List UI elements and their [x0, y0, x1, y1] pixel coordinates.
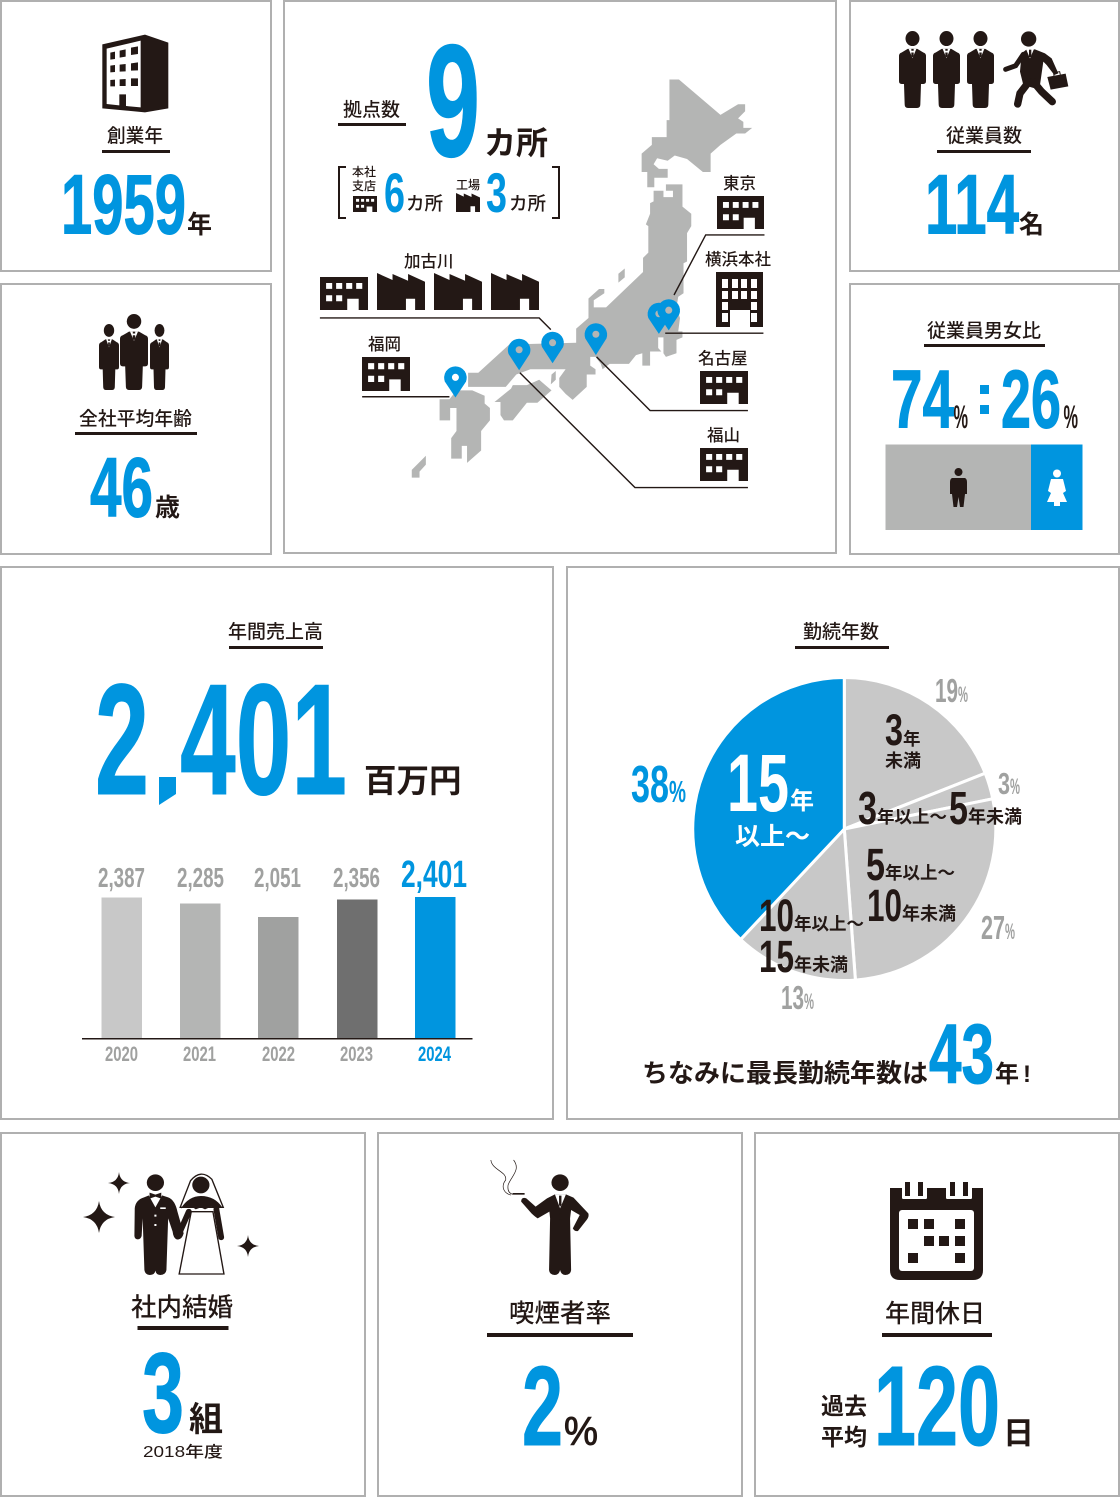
number: 74%:26%: 26: [1001, 352, 1061, 446]
panel: founding year: [1, 1, 271, 271]
bar chart: 2022: [262, 1042, 295, 1066]
site: 福山: [700, 426, 748, 481]
leader lines: [320, 235, 764, 488]
note: 2018年度: 2018年度: [143, 1443, 223, 1461]
pie percent labels: %: [669, 774, 686, 809]
bar chart: 2020: [105, 1042, 138, 1066]
panel: annual sales: [0, 0, 553, 1119]
breakdown: factories: [456, 161, 546, 224]
bar chart: 2,285: [177, 862, 224, 893]
note: longest tenure: ちなみに最長勤続年数は: [642, 1060, 928, 1088]
number: 2,401百万円: [0, 0, 462, 828]
site: 横浜本社: [705, 250, 772, 327]
number: 過去平均120日: 過去: [821, 1393, 867, 1419]
breakdown: offices: 本社: [352, 164, 376, 179]
note: longest tenure: !: [1023, 1061, 1031, 1088]
heading: 勤続年数: [795, 621, 889, 649]
ratio bar: [886, 444, 1082, 530]
bar chart: 2,051: [254, 862, 301, 893]
number: 過去平均120日: 120: [874, 1343, 1000, 1469]
pie label: 3 to 5 years: 年未満: [968, 806, 1022, 827]
pie label: 3 to 5 years: [858, 782, 1022, 834]
pie label: 3 to 5 years: 年以上～: [877, 807, 947, 827]
number: 2,401百万円: 401: [180, 652, 347, 828]
icon: office building: [102, 35, 168, 112]
heading: 従業員男女比: 従業員男女比: [927, 320, 1041, 342]
icon: woman: [1047, 470, 1067, 506]
pie label: under 3 years: 未満: [885, 751, 921, 771]
pie percent labels: %: [1010, 774, 1020, 799]
icon: sparkles: [83, 1172, 259, 1257]
bar chart: 2021: [183, 1042, 216, 1066]
panel: employees: [850, 1, 1119, 271]
number: 114名: 114: [925, 158, 1019, 252]
number: 114名: 名: [1019, 211, 1044, 239]
number: 1959年: 1959: [61, 158, 186, 252]
site: 福岡: 福岡: [368, 335, 401, 354]
heading: 喫煙者率: [487, 1300, 633, 1337]
site: 東京: 東京: [723, 174, 756, 193]
icon: smoker: [491, 1160, 589, 1275]
heading: 創業年: [102, 125, 170, 153]
pie label: 5 to 10 years: 10: [867, 880, 902, 931]
pie percent labels: 3: [998, 766, 1010, 801]
icon: man: [950, 468, 967, 507]
heading: 従業員数: 従業員数: [946, 125, 1022, 147]
number: 74%:26%: %: [954, 399, 968, 435]
pie label: over 15 years: 15: [727, 738, 789, 829]
heading: 創業年: 創業年: [107, 125, 163, 147]
breakdown: factories: カ所: [509, 193, 546, 214]
icon: three people: [99, 314, 169, 390]
site: 東京: [717, 174, 764, 229]
heading: 喫煙者率: 喫煙者率: [509, 1300, 611, 1328]
pie label: 10 to 15 years: [759, 890, 864, 982]
pie label: over 15 years: 年: [790, 788, 814, 815]
heading: 従業員数: [937, 125, 1031, 153]
number: 2%: %: [564, 1410, 598, 1454]
pie label: 10 to 15 years: 15: [759, 931, 794, 982]
pie percent labels: %: [804, 989, 814, 1014]
pie chart: [693, 677, 996, 981]
icon: calendar: [890, 1180, 983, 1280]
pie percent labels: [631, 672, 1020, 1016]
pie label: 5 to 10 years: [866, 839, 956, 931]
pie percent labels: 38: [631, 756, 669, 814]
pie percent labels: 13: [781, 979, 804, 1016]
breakdown: offices: 支店: [352, 178, 376, 193]
heading: 年間休日: [882, 1300, 992, 1337]
number: 2,401百万円: 百万円: [364, 763, 462, 799]
number: 2%: 2: [522, 1343, 563, 1469]
number: 過去平均120日: 平均: [821, 1424, 867, 1450]
site: 加古川: [320, 252, 539, 310]
panel: average age: [1, 284, 271, 554]
heading: 年間休日: 年間休日: [885, 1300, 985, 1328]
panel: annual holidays: [755, 1133, 1119, 1496]
panel: tenure: [567, 567, 1119, 1119]
pie percent labels: 19: [935, 672, 958, 709]
heading: 年間売上高: 年間売上高: [228, 621, 323, 643]
number: 9カ所: カ所: [484, 125, 548, 161]
note: longest tenure: [642, 1007, 1031, 1101]
pie label: 5 to 10 years: 5: [866, 839, 885, 890]
number: 74%:26%: %: [1064, 399, 1078, 435]
bar chart: 2024: [418, 1042, 451, 1066]
pie percent labels: %: [1005, 919, 1015, 944]
number: 2,401百万円: 2: [95, 652, 149, 828]
number: 過去平均120日: [821, 1343, 1034, 1469]
panel: locations map: [284, 1, 836, 553]
panel: office marriages: [1, 1133, 365, 1496]
heading: 勤続年数: 勤続年数: [803, 621, 879, 643]
heading: 拠点数: [338, 99, 406, 126]
icon: employees: [899, 31, 1068, 108]
panel: smoking rate: [378, 1133, 742, 1496]
number: 46歳: 46: [90, 440, 153, 534]
icon: bride and groom: [134, 1174, 224, 1275]
map of Japan: [412, 79, 752, 478]
site: 福山: 福山: [707, 426, 740, 445]
pie label: 3 to 5 years: 5: [949, 782, 968, 834]
number: 3組: 組: [189, 1401, 223, 1439]
pie label: 3 to 5 years: 3: [858, 782, 877, 834]
site: 名古屋: 名古屋: [698, 349, 748, 368]
pie label: under 3 years: [885, 706, 921, 771]
number: 1959年: 年: [187, 211, 212, 239]
pie label: 5 to 10 years: 年以上～: [885, 863, 955, 883]
breakdown: offices: [352, 161, 443, 224]
panel: gender ratio: [850, 284, 1119, 554]
pie label: 10 to 15 years: 年以上～: [794, 914, 864, 934]
bar chart: [82, 854, 472, 1066]
location pins: [444, 299, 680, 397]
pie label: 10 to 15 years: 年未満: [794, 954, 848, 975]
pie label: under 3 years: 3: [885, 706, 903, 755]
note: longest tenure: 年: [995, 1061, 1019, 1088]
pie percent labels: %: [958, 682, 968, 707]
bar chart: 2,401: [401, 854, 467, 896]
pie label: 10 to 15 years: 10: [759, 890, 794, 941]
site: 名古屋: [698, 349, 748, 404]
note: longest tenure: 43: [929, 1007, 994, 1101]
bar chart: 2023: [340, 1042, 373, 1066]
site: 加古川: 加古川: [404, 252, 454, 271]
breakdown brackets: [339, 167, 559, 218]
heading: 全社平均年齢: 全社平均年齢: [79, 408, 192, 430]
site: 福岡: [362, 335, 410, 391]
heading: 社内結婚: 社内結婚: [131, 1294, 233, 1322]
breakdown: factories: 工場: [456, 178, 480, 192]
number: 3組: 3: [142, 1330, 184, 1457]
number: 9カ所: 9: [426, 11, 480, 190]
bar chart: 2,356: [333, 862, 380, 893]
site: 横浜本社: 横浜本社: [705, 250, 772, 269]
number: 74%:26%: 74: [891, 352, 954, 446]
breakdown: factories: 3: [486, 161, 507, 224]
bar chart: 2,387: [98, 862, 145, 893]
pie label: over 15 years: 以上～: [735, 823, 810, 851]
heading: 拠点数: 拠点数: [343, 99, 400, 121]
number: 過去平均120日: 日: [1003, 1416, 1034, 1451]
pie percent labels: 27: [981, 909, 1005, 946]
number: 46歳: 歳: [155, 494, 180, 522]
pie label: under 3 years: 年: [903, 729, 920, 749]
pie label: 5 to 10 years: 年未満: [902, 903, 956, 924]
breakdown: offices: 6: [384, 161, 405, 224]
number: 74%:26%: [891, 352, 1078, 446]
breakdown: offices: カ所: [406, 193, 443, 214]
